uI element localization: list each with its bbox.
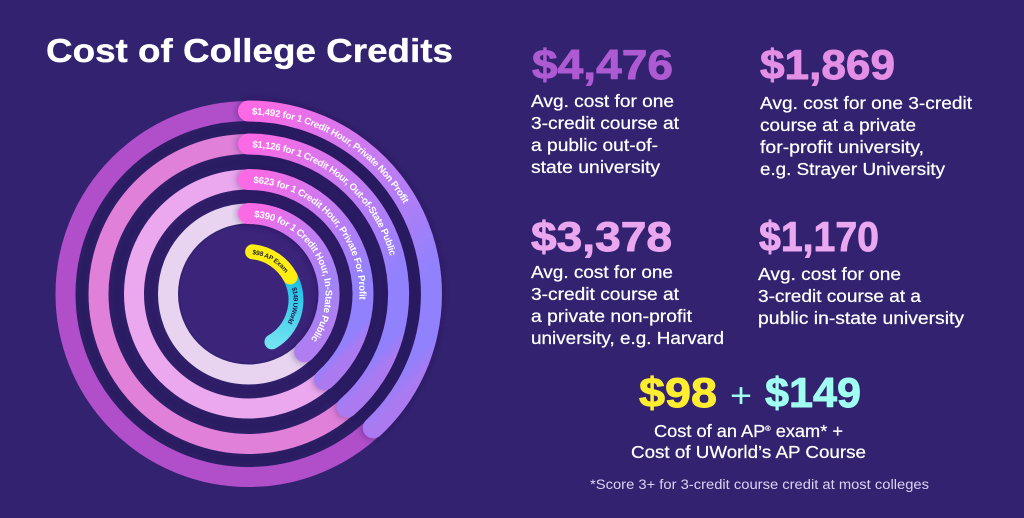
stat: private for-profit: course at a private — [760, 115, 916, 135]
stat: public out-of-state: 3-credit course at — [531, 113, 679, 133]
stat: public out-of-state: state university — [531, 157, 660, 177]
stat: public out-of-state — [531, 41, 679, 177]
stat: public in-state: 3-credit course at a — [758, 286, 921, 306]
stat: private for-profit: Avg. cost for one 3-credit — [760, 93, 972, 113]
callout: AP plus UWorld cost — [590, 369, 929, 492]
stat: private non-profit: a private non-profit — [531, 306, 692, 326]
arc: UWorld course — [264, 274, 304, 350]
callout: AP plus UWorld cost: $98 — [639, 369, 717, 416]
ring: private non-profit — [56, 100, 442, 487]
stat: public out-of-state: a public out-of- — [531, 135, 658, 155]
title: Cost of College Credits — [46, 33, 453, 70]
stat: public out-of-state: Avg. cost for one — [531, 91, 674, 111]
arc: UWorld course: $149 UWorld — [288, 287, 298, 324]
ring: in-state public — [158, 203, 340, 384]
stat: private non-profit — [531, 213, 724, 348]
stat: public in-state: public in-state university — [758, 308, 964, 328]
arc: AP exam — [245, 244, 298, 284]
stat: public in-state: Avg. cost for one — [758, 264, 901, 284]
callout: AP plus UWorld cost: $149 — [765, 369, 861, 416]
ring: private for-profit: $623 for 1 Credit Hour, Private For Profit — [254, 176, 366, 300]
ring: private non-profit: $1,492 for 1 Credit Hour, Private Non Profit — [252, 108, 408, 204]
callout: AP plus UWorld cost: Cost of UWorld’s AP Course — [631, 442, 866, 462]
stat: private for-profit: e.g. Strayer University — [760, 159, 945, 179]
stat: public in-state: $1,170 — [759, 213, 879, 260]
ring: out-of-state public — [88, 134, 410, 454]
ring: private for-profit — [124, 169, 374, 418]
radial bar chart: cost per credit hour — [56, 100, 442, 487]
stat: public out-of-state: $4,476 — [532, 41, 673, 88]
stat: private for-profit: $1,869 — [760, 41, 895, 88]
callout: AP plus UWorld cost: ® — [765, 425, 772, 433]
stat: private for-profit: for-profit university, — [760, 137, 924, 157]
stat: private for-profit — [760, 41, 972, 179]
stat: private non-profit: $3,378 — [531, 213, 672, 260]
ring: out-of-state public: $1,126 for 1 Credit Hour, Out-of-State Public — [252, 140, 396, 256]
stat: private non-profit: university, e.g. Harvard — [531, 328, 724, 348]
stat: private non-profit: 3-credit course at — [531, 284, 679, 304]
callout: AP plus UWorld cost: Cost of an AP — [654, 421, 761, 441]
ring: in-state public: $390 for 1 Credit Hour, In-State Public — [254, 210, 332, 342]
callout: AP plus UWorld cost: *Score 3+ for 3-credit course credit at most colleges — [590, 477, 929, 492]
arc: AP exam: $98 AP Exam — [252, 250, 288, 273]
callout: AP plus UWorld cost: + — [730, 377, 752, 415]
callout: AP plus UWorld cost: exam* + — [771, 421, 843, 441]
stat: public in-state — [758, 213, 964, 328]
stat: private non-profit: Avg. cost for one — [531, 262, 673, 282]
